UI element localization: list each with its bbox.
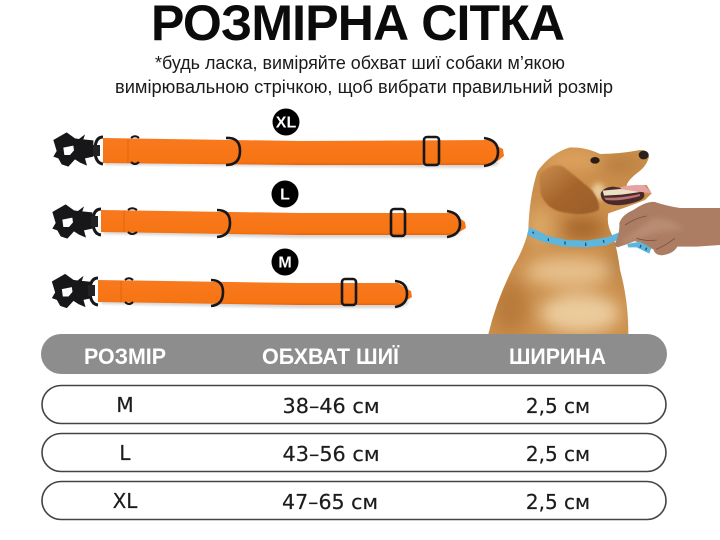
instruction text: вимірювальною стрічкою, щоб вибрати правильний розмір xyxy=(115,77,613,97)
badge: M: M xyxy=(278,254,292,272)
ear xyxy=(539,165,599,214)
table header xyxy=(41,334,667,374)
table row: L: L xyxy=(119,441,131,465)
badge: XL xyxy=(272,108,300,136)
dog body xyxy=(488,147,652,334)
collar: XL xyxy=(53,132,504,168)
finger shadows xyxy=(625,216,675,249)
table row: L: 43–56 см xyxy=(282,442,380,466)
mouth xyxy=(601,185,652,205)
badge: L xyxy=(272,180,298,208)
table header: ОБХВАТ ШИЇ xyxy=(262,344,400,369)
collar: L xyxy=(52,204,466,239)
table row: XL: 47–65 см xyxy=(282,490,378,514)
table row: M: M xyxy=(116,393,134,417)
table header: ШИРИНА xyxy=(509,344,606,369)
measuring tape (end) xyxy=(627,242,651,254)
table row: L xyxy=(42,434,666,472)
hand highlight xyxy=(622,218,683,244)
nose xyxy=(639,151,649,159)
table row: XL xyxy=(42,482,666,520)
badge: XL: XL xyxy=(276,114,296,132)
instruction text xyxy=(115,53,613,97)
measuring tape (neck) xyxy=(527,227,624,247)
badge: M xyxy=(272,248,298,276)
table row: M: 38–46 см xyxy=(282,394,380,418)
table header: РОЗМІР xyxy=(84,344,166,369)
table row: XL: 2,5 см xyxy=(526,490,590,514)
table row: XL: XL xyxy=(113,489,138,513)
table row: M: 2,5 см xyxy=(526,394,590,418)
instruction text: *будь ласка, виміряйте обхват шиї собаки м’якою xyxy=(155,53,565,73)
badge: L: L xyxy=(280,186,290,204)
photo: golden retriever with measuring tape xyxy=(480,143,720,337)
hand and forearm xyxy=(614,202,720,255)
table row: M xyxy=(42,386,666,424)
eye xyxy=(590,157,600,164)
collar: M xyxy=(52,274,412,308)
table row: L: 2,5 см xyxy=(526,442,590,466)
